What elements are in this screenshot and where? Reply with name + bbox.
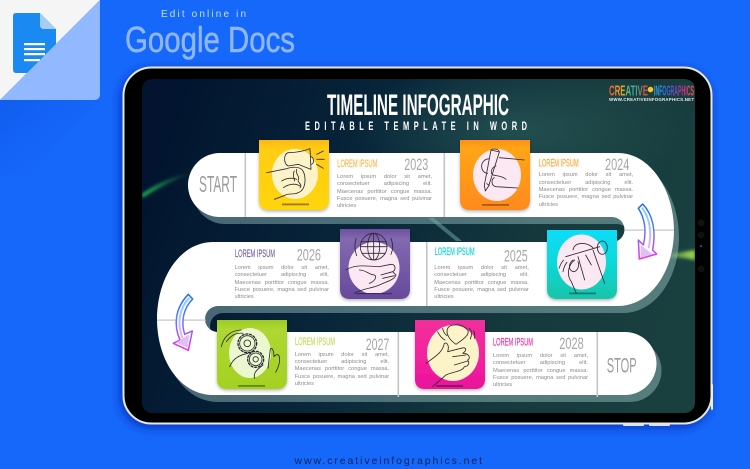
- light streak in slot: [428, 218, 462, 241]
- step 2024 heading: LOREM IPSUM: [539, 158, 579, 170]
- step 2028 heading: LOREM IPSUM: [493, 337, 533, 349]
- step 2023 text: [337, 174, 432, 211]
- step 2026 text: Lorem ipsum dolor sit amet,: [234, 265, 329, 271]
- step 2027 text: consectetuer adipiscing elit.: [295, 359, 389, 365]
- step 2027 text: ultricies: [295, 381, 314, 387]
- step 2026 text: Fusce posuere, magna sed pulvinar: [234, 287, 329, 293]
- step 2025 text: Maecenas porttitor congue massa.: [434, 280, 529, 286]
- step 2026 text: [234, 265, 329, 302]
- serpentine track: [157, 153, 674, 395]
- step 2028 card: heart in hand: [415, 320, 485, 389]
- step 2025 year: 2025: [504, 248, 528, 266]
- tablet screen: [142, 60, 695, 413]
- step 2028 text: Maecenas porttitor congue massa.: [493, 368, 588, 374]
- step 2028 text: Fusce posuere, magna sed pulvinar: [493, 375, 588, 381]
- track dividers: [157, 153, 674, 397]
- logo: Creative Infographics: WWW.CREATIVEINFOGRAPHICS.NET: [609, 97, 694, 102]
- label: edit online in: Edit online in: [161, 9, 246, 20]
- arrow: 2024 to 2025: [638, 204, 657, 259]
- subtitle: EDITABLE TEMPLATE IN WORD: [305, 120, 527, 134]
- step 2026 text: ultricies: [234, 294, 254, 300]
- corner badge: folded page: [0, 0, 100, 100]
- icon: Google Docs document: [13, 13, 56, 73]
- step 2028 text: ultricies: [493, 382, 512, 388]
- step 2023 text: ultricies: [337, 203, 356, 209]
- step 2025 text: consectetuer adipiscing elit.: [434, 272, 529, 278]
- step 2023 card: megaphone fist: [259, 140, 329, 210]
- step 2026 text: Maecenas porttitor congue massa.: [234, 280, 329, 286]
- step 2024 text: [539, 172, 633, 209]
- step 2026 text: consectetuer adipiscing elit.: [234, 272, 329, 278]
- step 2024 text: Fusce posuere, magna sed pulvinar: [539, 194, 633, 200]
- step 2025 card: threading hand: [547, 230, 617, 299]
- step 2024 year: 2024: [605, 156, 629, 174]
- step 2028 year: 2028: [559, 335, 584, 353]
- step 2028 text: consectetuer adipiscing elit.: [493, 360, 588, 366]
- step 2023 text: consectetuer adipiscing elit.: [337, 181, 432, 187]
- step 2027 heading: LOREM IPSUM: [295, 336, 335, 348]
- step 2025 text: ultricies: [434, 294, 454, 300]
- step 2026 year: 2026: [297, 247, 321, 265]
- footer url: www.creativeinfographics.net: [294, 455, 482, 467]
- step 2024 card: pencil hand: [460, 140, 530, 210]
- step 2026 card: globe in hand: [340, 229, 410, 299]
- step 2023 text: Fusce posuere, magna sed pulvinar: [337, 196, 432, 202]
- logotype: Google Docs: Google Docs: [125, 19, 295, 60]
- step 2024 text: Maecenas porttitor congue massa.: [539, 187, 633, 193]
- step 2027 text: [295, 352, 389, 389]
- STOP label: STOP: [607, 353, 637, 377]
- step 2025 heading: LOREM IPSUM: [435, 246, 475, 258]
- step 2023 heading: LOREM IPSUM: [337, 158, 377, 170]
- step 2026 heading: LOREM IPSUM: [235, 248, 275, 260]
- step 2028 text: [493, 353, 588, 390]
- step 2027 text: Maecenas porttitor congue massa.: [295, 366, 389, 372]
- diagonal page shadow: [0, 100, 100, 175]
- step 2027 text: Lorem ipsum dolor sit amet,: [295, 352, 389, 358]
- step 2027 card: gears in hands: [217, 320, 287, 389]
- arrow: 2026 to 2027: [173, 294, 193, 350]
- step 2025 text: [434, 265, 529, 302]
- step 2025 text: Lorem ipsum dolor sit amet,: [434, 265, 529, 271]
- title: TIMELINE INFOGRAPHIC: [327, 89, 509, 122]
- step 2027 text: Fusce posuere, magna sed pulvinar: [295, 374, 389, 380]
- step 2027 year: 2027: [366, 336, 389, 354]
- step 2025 text: Fusce posuere, magna sed pulvinar: [434, 287, 529, 293]
- step 2024 text: Lorem ipsum dolor sit amet,: [539, 172, 633, 178]
- step 2024 text: consectetuer adipiscing elit.: [539, 180, 633, 186]
- START label: START: [199, 171, 237, 197]
- tablet body: [124, 68, 713, 426]
- step 2023 text: Lorem ipsum dolor sit amet,: [337, 174, 432, 180]
- logo: Creative Infographics: CREATIVE: [609, 82, 648, 100]
- step 2023 year: 2023: [404, 156, 428, 174]
- step 2028 text: Lorem ipsum dolor sit amet,: [493, 353, 588, 359]
- step 2023 text: Maecenas porttitor congue massa.: [337, 189, 432, 195]
- serpentine track shadow: [162, 160, 679, 402]
- step 2024 text: ultricies: [539, 202, 558, 208]
